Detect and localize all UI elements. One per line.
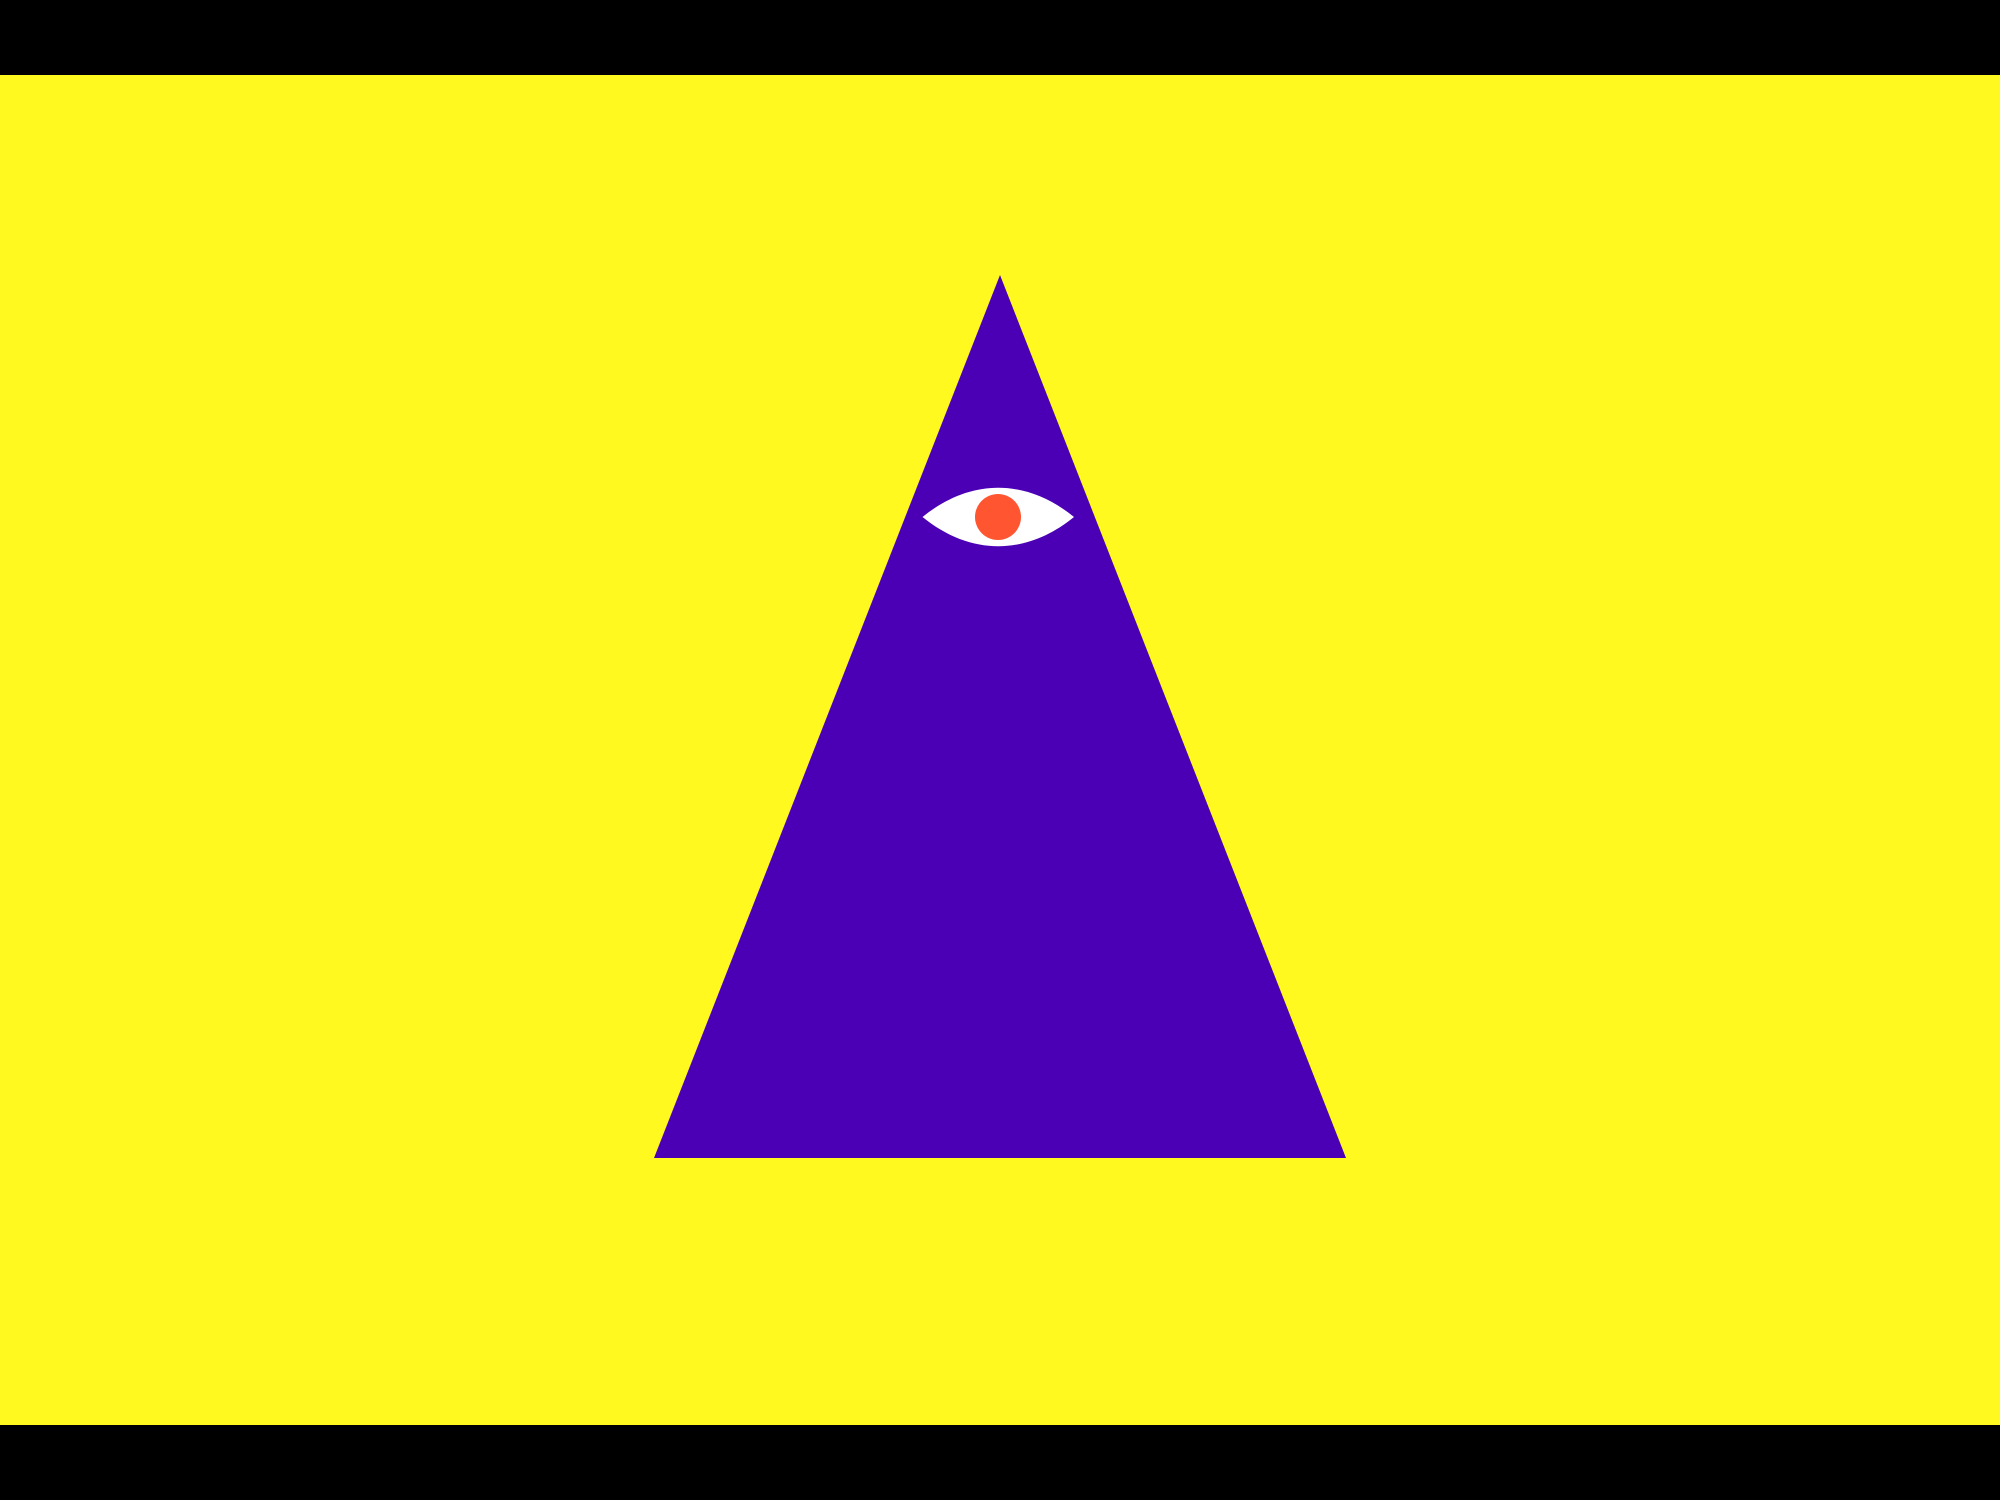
purple triangle bbox=[654, 275, 1346, 1158]
eye white bbox=[922, 488, 1074, 546]
eye pupil bbox=[975, 494, 1021, 540]
bottom black band bbox=[0, 1425, 2000, 1500]
icon: eye bbox=[922, 488, 1074, 546]
top black band bbox=[0, 0, 2000, 75]
